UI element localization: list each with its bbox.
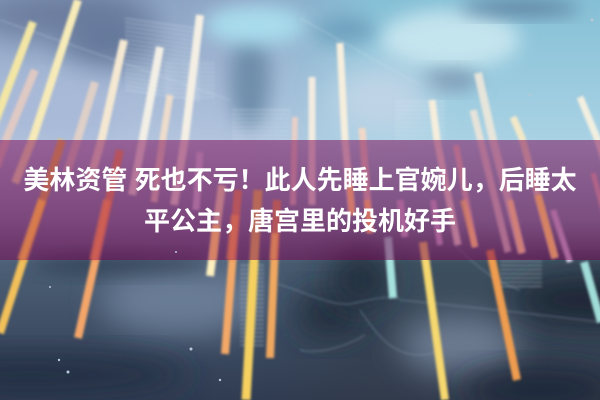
orange bar highlights on the band [21, 185, 555, 260]
light horizontal data stripes [125, 18, 542, 347]
title: 美林资管 死也不亏！此人先睡上官婉儿，后睡太 [23, 165, 577, 195]
title: 平公主，唐宫里的投机好手 [144, 206, 456, 236]
translucent purple title band [0, 140, 600, 260]
title [23, 165, 577, 236]
lower bars under the band [0, 140, 517, 400]
